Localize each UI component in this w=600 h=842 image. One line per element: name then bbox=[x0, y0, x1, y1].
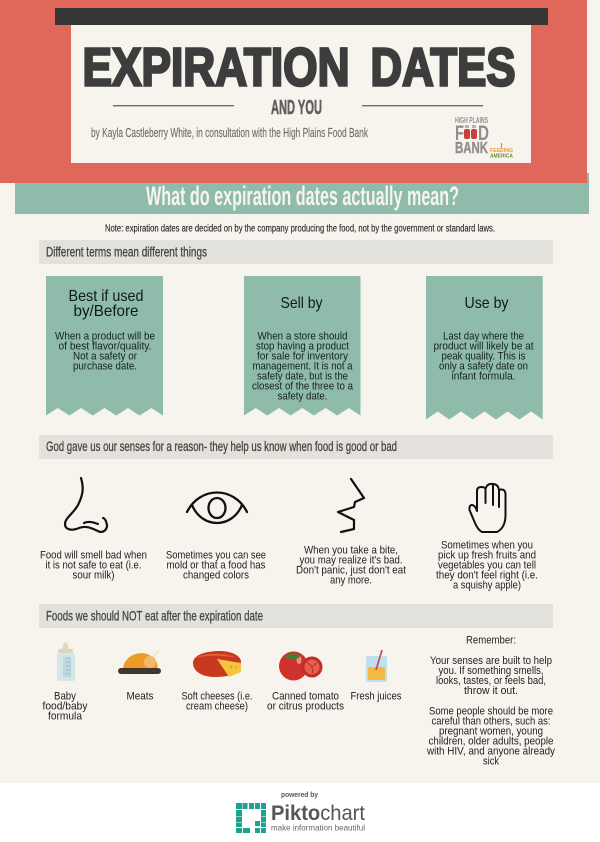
card text: management. It is not a bbox=[252, 360, 352, 372]
text: touch bbox=[436, 540, 538, 592]
card text: for sale for inventory bbox=[257, 350, 349, 362]
label: baby food: food/baby bbox=[42, 700, 88, 712]
label: fresh juices: Fresh juices bbox=[350, 690, 402, 702]
text: taste: you may realize it's bad. bbox=[300, 554, 402, 566]
text block: remember bbox=[426, 634, 556, 768]
icon: Piktochart logo bbox=[236, 803, 266, 833]
label: canned tomato bbox=[267, 690, 345, 712]
icon: eye bbox=[187, 492, 247, 523]
logo: High Plains Food Bank: AMERICA bbox=[490, 154, 513, 160]
icon: tomatoes bbox=[279, 651, 322, 680]
icon: hand bbox=[469, 484, 506, 532]
panel: teal subtitle band bbox=[15, 173, 589, 214]
text block: remember: Some people should be more bbox=[429, 706, 553, 718]
text: smell: Food will smell bad when bbox=[40, 550, 147, 562]
logo: High Plains Food Bank: D bbox=[478, 122, 489, 145]
logo: High Plains Food Bank: FEEDING bbox=[490, 148, 513, 154]
text: touch: Sometimes when you bbox=[441, 540, 533, 552]
text block: remember: pregnant women, young bbox=[439, 726, 543, 738]
panel: title card bbox=[71, 25, 531, 163]
card text: product will likely be at bbox=[434, 340, 534, 352]
logo: High Plains Food Bank bbox=[455, 116, 513, 160]
subtitle: and you: AND YOU bbox=[271, 97, 322, 119]
text: smell: it is not safe to eat (i.e. bbox=[46, 560, 142, 572]
logo: High Plains Food Bank: HIGH PLAINS bbox=[455, 116, 488, 125]
card text: Last day where the bbox=[443, 330, 524, 342]
label: baby food bbox=[42, 690, 88, 722]
card text: of best flavor/quality. bbox=[58, 340, 152, 352]
card text: only a safety date on bbox=[439, 360, 528, 372]
card text: peak quality. This is bbox=[442, 350, 526, 362]
card heading: Best if used bbox=[68, 288, 144, 305]
panel: sell by bbox=[244, 276, 360, 416]
card text: When a product will be bbox=[55, 330, 155, 342]
title: DATES bbox=[370, 38, 516, 98]
panel: use by bbox=[426, 276, 543, 420]
label: soft cheeses: Soft cheeses (i.e. bbox=[182, 690, 252, 702]
label: meats: Meats bbox=[126, 690, 154, 702]
text: taste: Don't panic, just don't eat bbox=[296, 564, 406, 576]
section header: different terms bbox=[39, 240, 553, 264]
label: soft cheeses: cream cheese) bbox=[186, 700, 248, 712]
icon: baby bottle bbox=[57, 642, 75, 681]
title: EXPIRATION bbox=[82, 38, 350, 98]
text: smell bbox=[40, 550, 147, 582]
logo: High Plains Food Bank: F bbox=[455, 122, 464, 145]
section header: foods: Foods we should NOT eat after the expiration date bbox=[46, 608, 263, 624]
icon: juice glass bbox=[366, 650, 387, 682]
panel: red header background bbox=[0, 0, 587, 183]
text block: remember: Remember: bbox=[466, 634, 516, 646]
text: touch: pick up fresh fruits and bbox=[438, 550, 536, 562]
text block: remember: throw it out. bbox=[464, 685, 518, 697]
card text bbox=[55, 330, 155, 372]
text: taste bbox=[296, 544, 406, 586]
byline: by Kayla Castleberry White, in consultation with the High Plains Food Bank bbox=[91, 126, 368, 140]
text: sight: mold or that a food has bbox=[166, 560, 266, 572]
icon: cheese wheel bbox=[193, 651, 241, 677]
text: touch: they don't feel right (i.e. bbox=[436, 570, 538, 582]
panel: best if used bbox=[46, 276, 163, 416]
text block: remember: careful than others, such as: bbox=[432, 716, 550, 728]
text: sight: changed colors bbox=[183, 570, 250, 582]
footer: Piktochart: Piktochart bbox=[271, 802, 365, 825]
text: taste: When you take a bite, bbox=[304, 544, 398, 556]
text block: remember: sick bbox=[483, 756, 500, 768]
card text: When a store should bbox=[258, 330, 348, 342]
card text: stop having a product bbox=[256, 340, 349, 352]
footer: Piktochart: powered by bbox=[281, 792, 318, 799]
text: touch: a squishy apple) bbox=[453, 580, 521, 592]
label: canned tomato: or citrus products bbox=[267, 700, 345, 712]
footer: Piktochart: make information beautiful bbox=[271, 822, 365, 832]
label: soft cheeses bbox=[182, 690, 252, 712]
section header: different terms: Different terms mean different things bbox=[46, 244, 207, 260]
icon: roast chicken bbox=[118, 650, 161, 674]
card text: Not a safety or bbox=[73, 350, 137, 362]
text block: remember: with HIV, and anyone already bbox=[426, 746, 556, 758]
note text: Note: expiration dates are decided on by the company producing the food, not by the government or standard laws. bbox=[105, 224, 495, 234]
card text bbox=[252, 330, 353, 402]
text block: remember: Your senses are built to help bbox=[430, 655, 552, 667]
icon: nose bbox=[65, 478, 107, 532]
card text: safety date. bbox=[278, 390, 328, 402]
section header: senses: God gave us our senses for a reason- they help us know when food is good or bad bbox=[46, 438, 397, 454]
card heading: Sell by bbox=[280, 295, 322, 312]
card text: purchase date. bbox=[73, 360, 137, 372]
section header: senses bbox=[39, 435, 553, 459]
icon: mouth bbox=[338, 479, 364, 532]
card text bbox=[434, 330, 534, 382]
dark top bar bbox=[55, 8, 548, 25]
footer: Piktochart bbox=[0, 783, 600, 842]
text: touch: vegetables you can tell bbox=[438, 560, 536, 572]
text block: remember: children, older adults, people bbox=[428, 736, 554, 748]
text block: remember: looks, tastes, or feels bad, bbox=[436, 675, 546, 687]
text: taste: any more. bbox=[330, 574, 372, 586]
text: smell: sour milk) bbox=[72, 570, 114, 582]
section header: foods bbox=[39, 604, 553, 628]
label: baby food: formula bbox=[48, 710, 82, 722]
logo: High Plains Food Bank: BANK bbox=[455, 140, 488, 157]
card heading bbox=[68, 288, 144, 320]
card text: closest of the three to a bbox=[252, 380, 353, 392]
text: sight: Sometimes you can see bbox=[166, 550, 266, 562]
card text: infant formula. bbox=[452, 370, 516, 382]
card heading: by/Before bbox=[74, 303, 139, 320]
label: baby food: Baby bbox=[54, 690, 77, 702]
label: canned tomato: Canned tomato bbox=[272, 690, 339, 702]
card heading: Use by bbox=[464, 295, 508, 312]
card text: safety date, but is the bbox=[257, 370, 348, 382]
text block: remember: you. If something smells, bbox=[438, 665, 544, 677]
text: sight bbox=[166, 550, 266, 582]
